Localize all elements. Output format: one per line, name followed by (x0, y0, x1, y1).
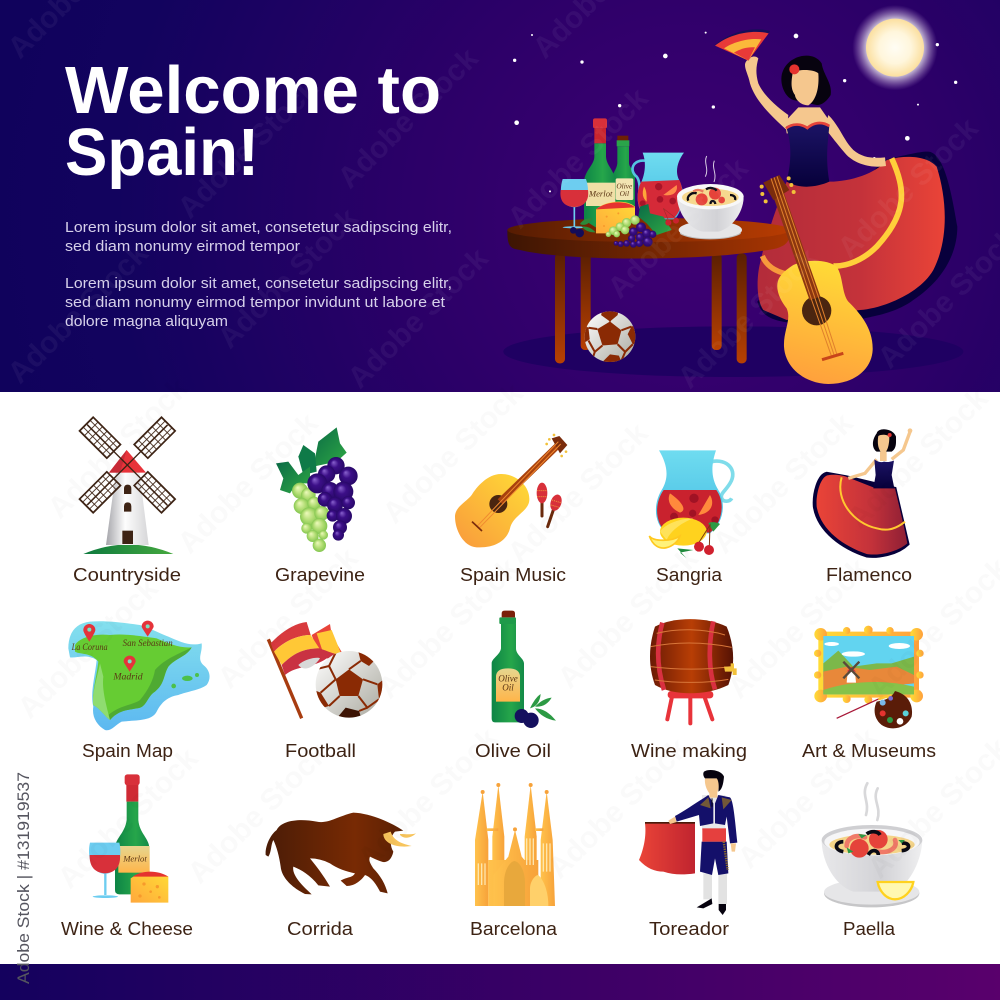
title: Welcome to (65, 53, 441, 128)
labels row 1: Spain Music (460, 565, 566, 585)
soccer ball (584, 311, 636, 362)
bull icon (266, 813, 416, 894)
bottle of merlot: Merlot (588, 189, 613, 199)
stock watermarks: Adobe Stock (552, 542, 705, 695)
stock watermarks: Adobe Stock (732, 722, 885, 875)
title: Spain! (65, 115, 259, 190)
stock watermarks: Adobe Stock (342, 242, 495, 395)
stock watermarks: Adobe Stock (722, 552, 875, 705)
stock watermarks: Adobe Stock (52, 742, 205, 895)
table top (507, 218, 790, 259)
stock watermarks: Adobe Stock (502, 417, 655, 570)
wine and cheese icon: Merlot (122, 854, 147, 864)
title (65, 53, 441, 190)
grapevine icon (276, 427, 358, 552)
moon (852, 5, 938, 90)
labels row 3 (61, 919, 896, 939)
spain map icon: La Coruna (71, 643, 108, 653)
guitar and maracas icon (455, 434, 567, 547)
labels row 1 (73, 565, 912, 585)
stock watermarks: Adobe Stock (212, 542, 365, 695)
header background panel (0, 0, 1000, 392)
intro text block: sed diam nonumy eirmod tempor invidunt ut labore et (65, 295, 445, 311)
wine barrel icon (650, 619, 737, 723)
stars (513, 32, 957, 192)
paella bowl (677, 184, 744, 239)
wine glass (560, 179, 588, 228)
bottle of merlot (584, 118, 615, 230)
toreador icon (639, 770, 737, 915)
stock watermarks: Adobe Stock (12, 572, 165, 725)
intro text block (65, 220, 452, 330)
flamenco dancer (745, 56, 957, 323)
barcelona cathedral icon (475, 783, 555, 906)
cherries (663, 208, 679, 226)
intro text block: Lorem ipsum dolor sit amet, consetetur sadipscing elitr, (65, 220, 452, 236)
labels row 3: Toreador (649, 919, 729, 939)
stock id vertical text: Adobe Stock | #131919537 (15, 772, 33, 984)
olives and leaves (570, 218, 596, 237)
stock watermarks: Adobe Stock (672, 242, 825, 395)
stock watermarks: Adobe Stock (542, 732, 695, 885)
footer band (0, 964, 1000, 1000)
labels row 3: Paella (843, 919, 896, 939)
labels row 2: Football (285, 741, 356, 761)
labels row 3: Corrida (287, 919, 354, 939)
intro text block: sed diam nonumy eirmod tempor (65, 239, 300, 255)
painting and palette icon (814, 626, 924, 728)
stock watermarks: Adobe Stock (332, 42, 485, 195)
labels row 3: Barcelona (470, 919, 558, 939)
stock watermarks: Adobe Stock (172, 72, 325, 225)
stock watermarks: Adobe Stock (372, 552, 525, 705)
fan (715, 29, 770, 61)
stock watermarks: Adobe Stock (182, 737, 335, 890)
flamenco dancer icon (814, 428, 912, 556)
bottle of olive oil: Oil (620, 189, 629, 198)
stock watermarks: Adobe Stock (707, 407, 860, 560)
sangria icon (649, 450, 733, 558)
bottle of olive oil: Olive (616, 181, 633, 190)
spain map icon (68, 621, 210, 730)
grapes and vine (606, 204, 672, 248)
labels row 2 (82, 741, 936, 761)
windmill icon (79, 417, 175, 554)
guitar (760, 175, 873, 384)
flag and football icon (268, 622, 386, 721)
cheese (596, 202, 635, 233)
spain map icon: Madrid (112, 672, 143, 682)
labels row 2: Spain Map (82, 741, 173, 761)
labels row 1: Flamenco (826, 565, 912, 585)
paella icon (822, 783, 922, 907)
ground shadow (503, 326, 963, 377)
table legs (555, 253, 747, 363)
labels row 1: Countryside (73, 565, 181, 585)
stock watermarks: Adobe Stock (842, 382, 995, 535)
labels row 3: Wine & Cheese (61, 919, 193, 939)
olive oil icon: Olive (498, 674, 518, 684)
stock watermarks: Adobe Stock (2, 237, 155, 390)
stock watermarks: Adobe Stock (352, 722, 505, 875)
labels row 1: Grapevine (275, 565, 365, 585)
stock watermarks: Adobe Stock (602, 152, 755, 305)
wine and cheese icon (89, 774, 168, 903)
olive oil icon: Oil (502, 683, 514, 693)
labels row 1: Sangria (656, 565, 723, 585)
stock watermarks: Adobe Stock (172, 407, 325, 560)
hero illustration (503, 5, 963, 384)
stock watermarks: Adobe Stock (502, 82, 655, 235)
olive oil icon (492, 611, 556, 728)
labels row 2: Olive Oil (475, 741, 551, 761)
stock watermarks: Adobe Stock (377, 377, 530, 530)
intro text block: dolore magna aliquyam (65, 314, 228, 330)
stock watermarks: Adobe Stock (42, 372, 195, 525)
labels row 2: Art & Museums (802, 741, 936, 761)
stock watermarks: Adobe Stock (212, 202, 365, 355)
spain map icon: San Sebastian (123, 639, 173, 649)
steam (705, 156, 715, 182)
stock watermarks: Adobe Stock (832, 112, 985, 265)
bottle of olive oil (612, 136, 635, 208)
intro text block: Lorem ipsum dolor sit amet, consetetur sadipscing elitr, (65, 276, 452, 292)
sangria jug (633, 153, 684, 219)
labels row 2: Wine making (631, 741, 747, 761)
